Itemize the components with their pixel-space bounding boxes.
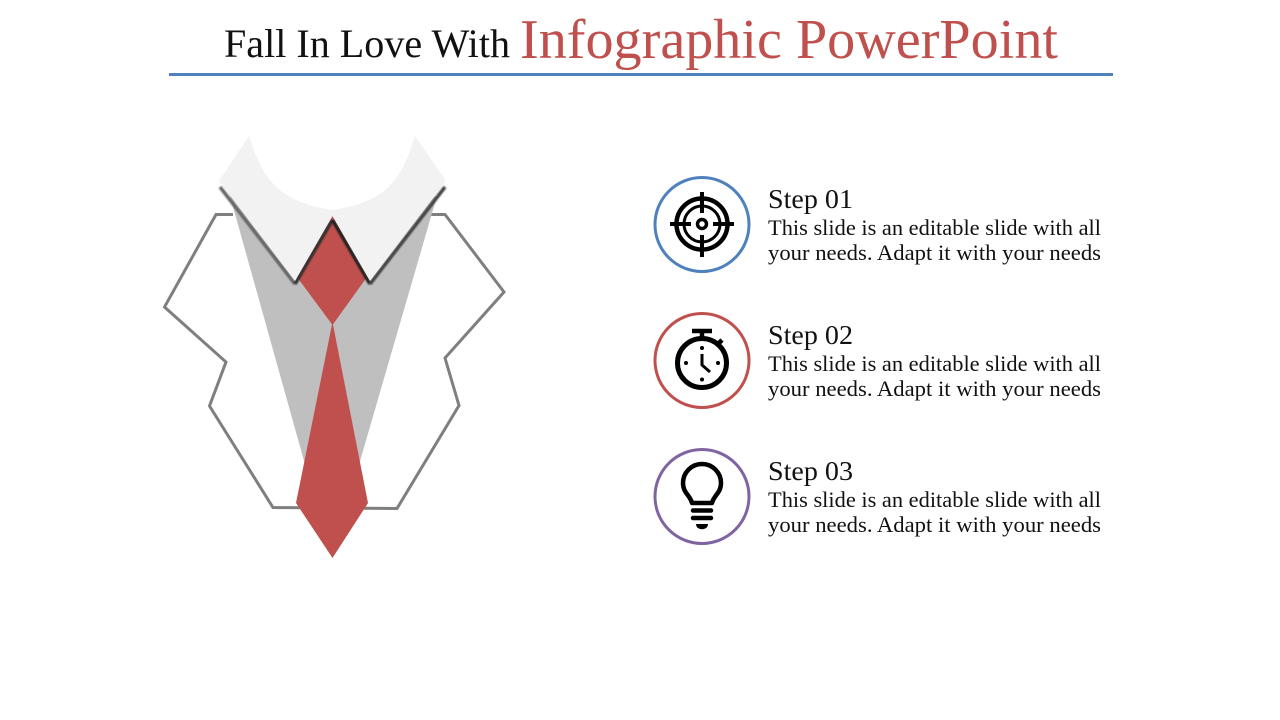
step 03 text bbox=[768, 456, 1101, 537]
icon: target bbox=[655, 178, 749, 272]
step 01 text: This slide is an editable slide with all bbox=[768, 215, 1101, 240]
icon: light bulb bbox=[655, 450, 749, 544]
step 02 text: Step 02 bbox=[768, 320, 853, 350]
icon: stopwatch bbox=[655, 314, 749, 408]
title: Infographic PowerPoint bbox=[520, 9, 1058, 71]
collar bbox=[219, 136, 446, 281]
step 01 text bbox=[768, 184, 1101, 265]
step 03 bbox=[655, 450, 1101, 544]
grey shirt front bbox=[230, 196, 437, 468]
step 03 text: Step 03 bbox=[768, 456, 853, 486]
step 02 text: your needs. Adapt it with your needs bbox=[768, 376, 1101, 401]
step 03 text: your needs. Adapt it with your needs bbox=[768, 512, 1101, 537]
step 01 text: Step 01 bbox=[768, 184, 853, 214]
title underline bbox=[169, 73, 1113, 76]
tie blade bbox=[296, 322, 368, 558]
title: Fall In Love With bbox=[224, 21, 510, 66]
step 03 text: This slide is an editable slide with all bbox=[768, 487, 1101, 512]
tie knot bbox=[297, 216, 367, 325]
shirt illustration bbox=[164, 136, 504, 558]
suit outline bbox=[164, 214, 504, 508]
step 02 text bbox=[768, 320, 1101, 401]
step 01 bbox=[655, 178, 1101, 272]
collar shadow bbox=[220, 187, 445, 284]
step 01 text: your needs. Adapt it with your needs bbox=[768, 240, 1101, 265]
step 02 bbox=[655, 314, 1101, 408]
title bbox=[224, 9, 1058, 71]
step 02 text: This slide is an editable slide with all bbox=[768, 351, 1101, 376]
